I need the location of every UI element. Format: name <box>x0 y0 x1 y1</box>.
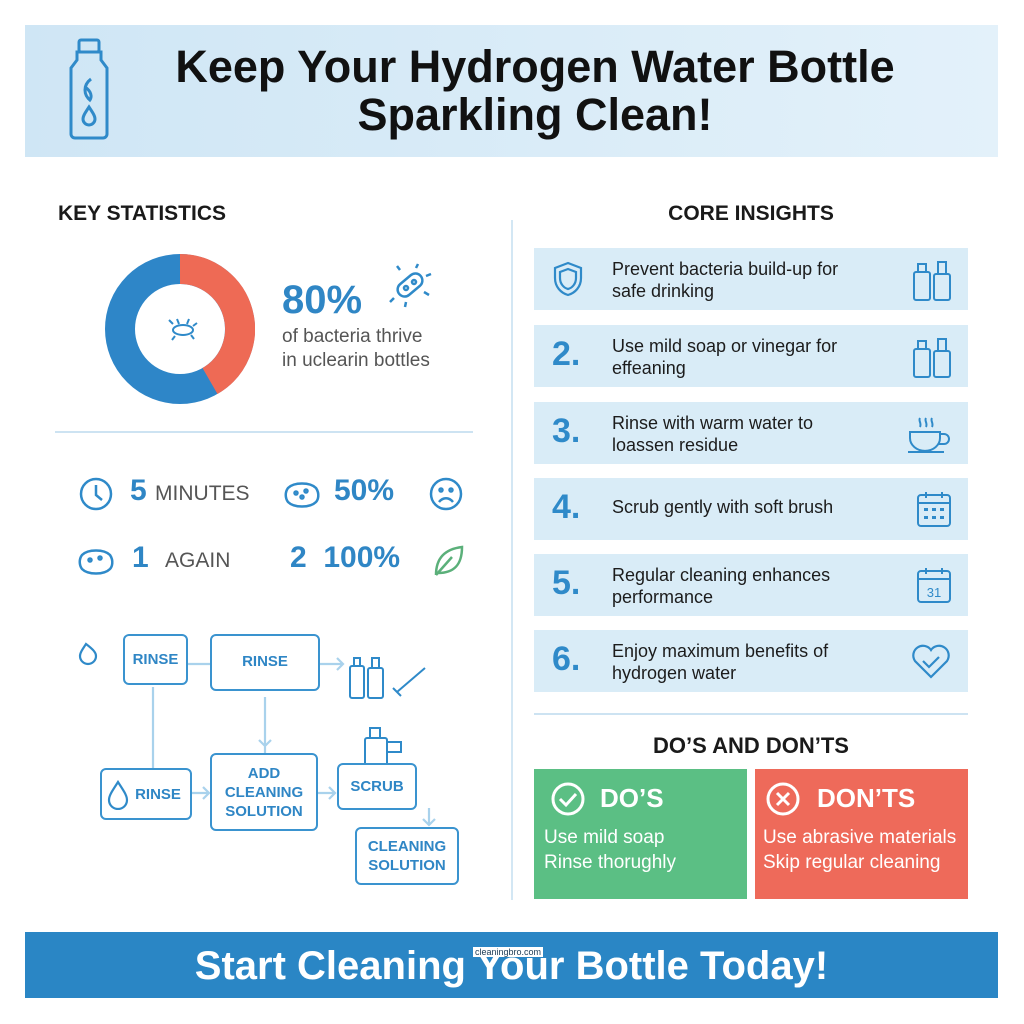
title: Keep Your Hydrogen Water Bottle <box>175 41 895 92</box>
insight 3: 3. <box>552 412 580 450</box>
header banner <box>25 25 998 157</box>
panel: donts: Use abrasive materials <box>763 827 956 848</box>
insight 5: 5. <box>552 564 580 602</box>
icon: bottle <box>70 38 108 140</box>
insight 3: Rinse with warm water to <box>612 413 813 433</box>
stat: 80%: 80% <box>282 278 362 322</box>
flowchart: SOLUTION <box>225 802 303 820</box>
stat: 80%: of bacteria thrive <box>282 326 422 347</box>
panel: dos: Rinse thorughly <box>544 852 676 873</box>
insight 6: hydrogen water <box>612 663 736 683</box>
stat row: again & 100% <box>78 541 464 576</box>
footer banner: Start Cleaning Your Bottle Today! <box>195 944 828 988</box>
stat row: minutes & 50%: 50% <box>334 474 394 507</box>
insight 5 <box>534 554 968 616</box>
divider <box>534 713 968 715</box>
panel: donts: DON’TS <box>817 783 915 813</box>
flowchart: SCRUB <box>350 778 404 795</box>
insight 4: Scrub gently with soft brush <box>612 497 833 517</box>
flowchart <box>78 634 459 885</box>
insight 2 <box>534 325 968 387</box>
insight 5: Regular cleaning enhances <box>612 565 830 585</box>
insight 6: 6. <box>552 640 580 678</box>
flowchart: SOLUTION <box>368 857 446 874</box>
insight 2: 2. <box>552 335 580 373</box>
footer banner <box>25 932 998 998</box>
insight 1: safe drinking <box>612 281 714 301</box>
heading: core insights: CORE INSIGHTS <box>668 202 834 225</box>
insight 5: 31 <box>927 585 941 600</box>
title: Sparkling Clean! <box>357 89 713 140</box>
flowchart: CLEANING <box>225 784 303 800</box>
flowchart: RINSE <box>242 653 288 670</box>
panel: donts <box>755 769 968 899</box>
stat row: minutes & 50%: 5 MINUTES <box>130 474 250 507</box>
heading: key statistics: KEY STATISTICS <box>58 202 226 225</box>
panel: dos: Use mild soap <box>544 827 664 848</box>
stat row: again & 100%: 2 100% <box>290 541 400 574</box>
icon: bacteria <box>389 264 432 308</box>
donut chart <box>105 254 255 404</box>
insight 4: 4. <box>552 488 580 526</box>
panel: dos <box>534 769 747 899</box>
insight 4 <box>534 478 968 540</box>
stat: 80% <box>282 264 432 371</box>
stat: 80%: in uclearin bottles <box>282 350 430 371</box>
divider <box>55 431 473 433</box>
insight 6 <box>534 630 968 692</box>
stat row: again & 100%: 1 AGAIN <box>132 541 230 574</box>
heading: dos and donts: DO’S AND DON’TS <box>653 733 849 758</box>
insight 3 <box>534 402 968 464</box>
insight 1: Prevent bacteria build-up for <box>612 259 838 279</box>
flowchart: CLEANING <box>368 838 446 855</box>
insight 2: Use mild soap or vinegar for <box>612 336 837 356</box>
flowchart: RINSE <box>135 786 181 802</box>
title <box>175 41 895 140</box>
panel: donts: Skip regular cleaning <box>763 852 940 873</box>
insight 5: performance <box>612 587 713 607</box>
insight 3: loassen residue <box>612 435 738 455</box>
flowchart: RINSE <box>133 651 178 668</box>
insight 6: Enjoy maximum benefits of <box>612 641 828 661</box>
insight 1 <box>534 248 968 310</box>
footer banner: cleaningbro.com <box>475 947 541 957</box>
flowchart: ADD <box>248 764 280 782</box>
panel: dos: DO’S <box>600 783 664 813</box>
stat row: minutes & 50% <box>80 474 462 510</box>
insight 2: effeaning <box>612 358 686 378</box>
